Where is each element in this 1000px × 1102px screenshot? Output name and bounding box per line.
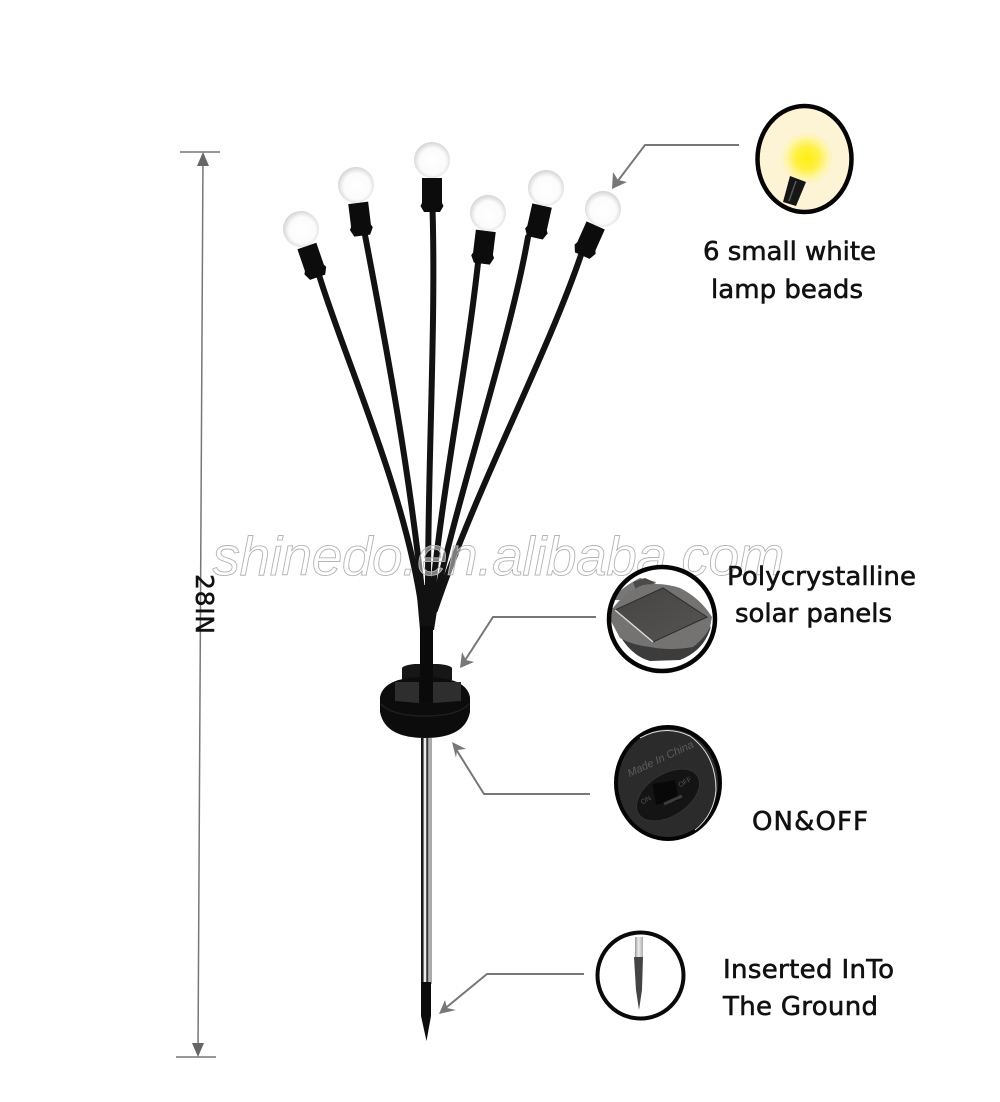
- lamp bead 6: [566, 185, 627, 263]
- callout icon: switch: ON: [640, 795, 653, 806]
- callout icon: switch: OFF: [677, 776, 693, 789]
- lamp bead 2: [336, 165, 380, 238]
- callout text: ground stake: The Ground: [722, 992, 878, 1022]
- lamp stems: [319, 212, 581, 610]
- callout text: solar panels: Polycrystalline: [727, 562, 916, 592]
- callout arrow: ground stake: [439, 974, 584, 1014]
- lamp bead 5: [517, 167, 567, 242]
- lamp bead 1: [278, 206, 335, 283]
- callout icon: glowing lamp bead: [758, 106, 852, 212]
- callout icon: solar panel: [609, 567, 715, 671]
- callout text: lamp beads: lamp beads: [711, 275, 863, 305]
- callout arrow: on off switch: [452, 742, 590, 794]
- lamp bead 3: [414, 142, 450, 212]
- callout text: lamp beads: [703, 237, 876, 305]
- callout icon: ground stake: [598, 932, 684, 1018]
- solar base: [380, 626, 470, 738]
- watermark: shinedo.en.alibaba.com: [212, 525, 784, 587]
- callout text: on off: ON&OFF: [752, 807, 868, 837]
- callout text: ground stake: Inserted InTo: [723, 955, 894, 985]
- callout icon: switch: [616, 727, 720, 839]
- callout icon: switch: Made In China: [626, 739, 696, 780]
- dimension line: height 28IN: [176, 152, 220, 1057]
- stem trunk top: [416, 585, 441, 630]
- ground spike: [421, 982, 431, 1041]
- callout arrow: lamp beads: [612, 145, 739, 189]
- lamp bead 4: [464, 193, 508, 266]
- callout text: ground stake: [722, 955, 894, 1022]
- dimension label: 28IN: [190, 574, 219, 634]
- callout text: solar panels: solar panels: [735, 599, 892, 629]
- callout text: solar panels: [727, 562, 916, 629]
- callout text: lamp beads: 6 small white: [703, 237, 876, 267]
- callout arrow: solar panels: [460, 617, 596, 668]
- metal pole: [421, 738, 432, 984]
- product: solar firefly stake light: [278, 142, 627, 1041]
